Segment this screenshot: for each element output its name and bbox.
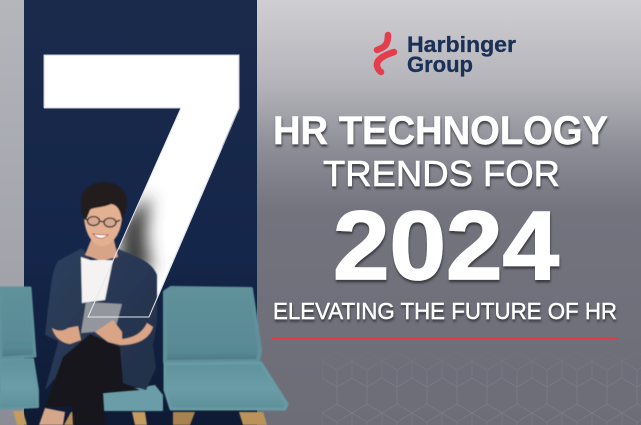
pants (45, 334, 140, 425)
title (273, 109, 608, 300)
hair (81, 182, 127, 220)
navy panel (24, 0, 257, 425)
ankle (39, 408, 65, 425)
red rule (272, 338, 618, 340)
logo mark (377, 35, 394, 72)
title: HR TECHNOLOGY (273, 109, 608, 153)
left hand (52, 326, 81, 344)
woman with tablet (39, 182, 157, 425)
smile (93, 234, 108, 238)
glasses (83, 216, 120, 227)
neck (85, 240, 118, 261)
chair under the woman (64, 385, 163, 425)
numeral 7 outline over woman (88, 108, 222, 317)
tablet (81, 302, 122, 333)
logo wordmark (407, 32, 516, 77)
right hand (95, 320, 153, 345)
white shirt (81, 257, 113, 303)
logo wordmark: Group (407, 52, 473, 77)
subtitle: ELEVATING THE FUTURE OF HR (273, 298, 617, 324)
logo wordmark: Harbinger (407, 32, 516, 57)
right chair (165, 288, 287, 425)
face (84, 203, 122, 246)
numeral 7 leg shadow (118, 195, 152, 272)
left chair (0, 288, 38, 425)
hexagon cube pattern (322, 364, 641, 425)
numeral 7 (44, 54, 240, 317)
title: TRENDS FOR (323, 153, 560, 194)
title: 2024 (333, 191, 559, 300)
jacket (45, 248, 157, 390)
logo (377, 32, 516, 77)
